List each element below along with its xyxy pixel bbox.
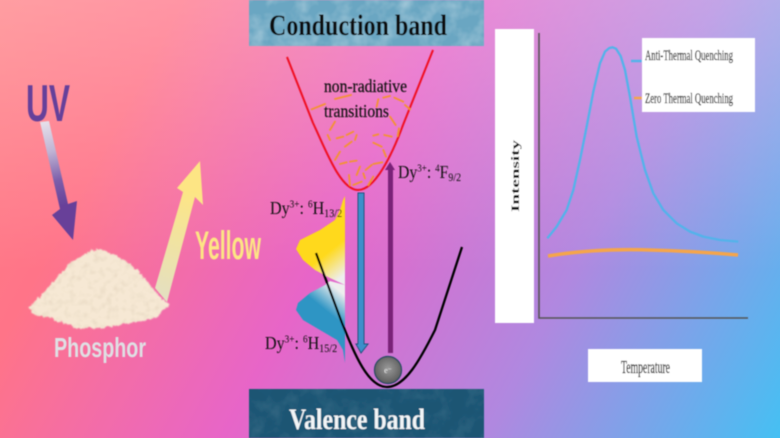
non-radiative transitions dashes	[312, 95, 410, 185]
arrow: blue downward emission	[356, 193, 368, 353]
label: Dy3+ 6H15/2: 15/2	[319, 343, 337, 355]
valence band: Valence band	[289, 403, 425, 436]
y-axis label box: Intensity	[508, 140, 522, 212]
panel: phosphor emission	[26, 75, 261, 363]
label: Yellow: Yellow	[195, 224, 261, 268]
yellow energy distribution	[296, 196, 345, 285]
icon: phosphor powder pile	[29, 249, 170, 328]
conduction band: Conduction band	[269, 9, 447, 42]
electron ball	[374, 356, 402, 384]
label: Dy3+ 6H15/2: Dy	[265, 333, 285, 353]
valence band	[249, 389, 484, 438]
label: Dy3+ 6H13/2: :	[299, 198, 308, 218]
curve: zero thermal quenching	[548, 250, 738, 256]
arrow: yellow emission	[155, 161, 203, 302]
label: Dy3+ 4F9/2: Dy	[398, 162, 417, 182]
label: Dy3+ 6H15/2: 6	[303, 334, 308, 346]
curve: anti-thermal quenching	[547, 47, 738, 242]
x-axis label box	[588, 349, 702, 382]
y-axis label box	[495, 29, 534, 323]
label: Dy3+ 6H15/2: H	[308, 333, 319, 353]
label: Dy3+ 6H13/2: 6	[308, 199, 313, 211]
label: non-radiative transitions: transitions	[324, 101, 389, 121]
conduction band	[249, 0, 484, 46]
arrow: UV excitation	[40, 121, 77, 240]
axes	[539, 33, 748, 318]
label: non-radiative transitions	[324, 76, 407, 121]
label: Dy3+ 6H13/2: 13/2	[324, 208, 342, 220]
label: non-radiative transitions: non-radiative	[324, 76, 407, 96]
red parabola	[287, 50, 433, 190]
electron ball: e⁻	[384, 366, 392, 375]
panel: thermal quenching chart	[495, 29, 755, 382]
arrow: purple upward excitation	[385, 162, 395, 353]
black parabola	[316, 247, 462, 387]
label: Dy3+ 4F9/2: 4	[435, 163, 440, 175]
label: Dy3+ 4F9/2: 3+	[417, 163, 427, 175]
label: Dy3+ 6H13/2: H	[313, 198, 324, 218]
label: Dy3+ 6H13/2: Dy	[270, 198, 290, 218]
blue energy distribution	[296, 281, 345, 363]
label: Dy3+ 4F9/2: :	[427, 162, 435, 182]
label: Dy3+ 4F9/2: F	[440, 162, 448, 182]
label: Dy3+ 6H15/2: :	[294, 333, 303, 353]
panel: energy band diagram	[249, 0, 484, 438]
label: Phosphor: Phosphor	[54, 332, 146, 363]
label: Dy3+ 6H13/2: 3+	[290, 199, 300, 211]
label: UV: UV	[26, 75, 70, 133]
label: Dy3+ 6H15/2: 3+	[285, 334, 295, 346]
x-axis label box: Temperature	[621, 357, 670, 377]
label: Dy3+ 4F9/2: 9/2	[448, 171, 461, 184]
legend	[631, 38, 755, 112]
